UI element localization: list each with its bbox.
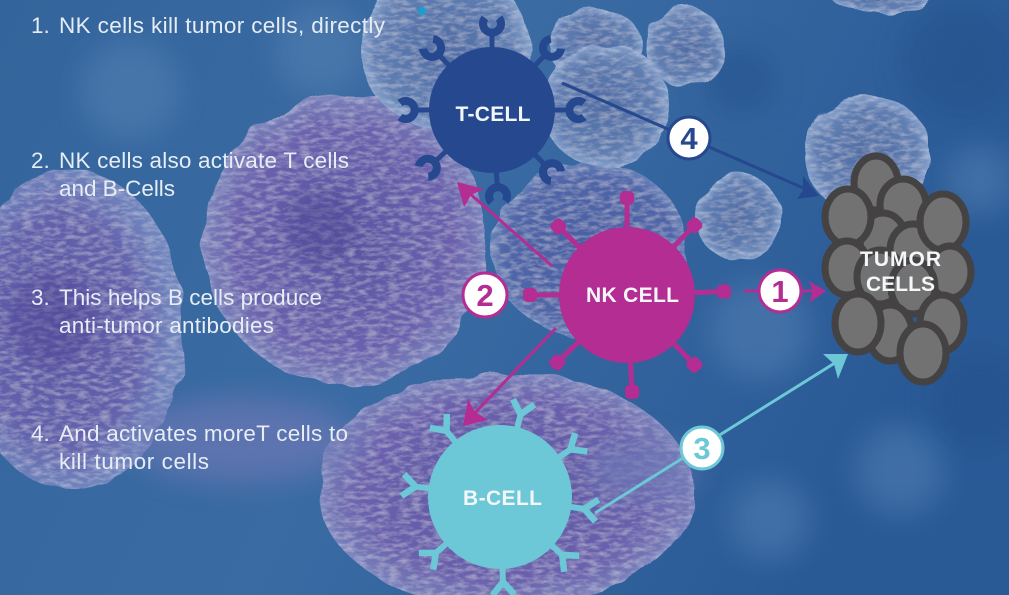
text: step 2: and B-Cells <box>59 176 175 201</box>
text: step 2: 2. <box>31 148 50 173</box>
badge 2 <box>463 273 507 317</box>
text: step 1: 1. <box>31 13 50 38</box>
T-cell <box>400 18 584 202</box>
tumor cell cluster <box>825 156 971 382</box>
text: step 3: 3. <box>31 285 50 310</box>
B-cell <box>401 399 599 595</box>
text: step 3 <box>31 285 322 338</box>
arrow 4: T-cell to tumor <box>562 83 819 199</box>
text: step 3: This helps B cells produce <box>59 285 322 310</box>
text: step 3: anti-tumor antibodies <box>59 313 274 338</box>
badge 2: 2 <box>476 278 494 313</box>
label: tumor cells: CELLS <box>866 273 935 296</box>
label: tumor cells: TUMOR <box>860 248 941 271</box>
text: step 2 <box>31 148 349 201</box>
badge 4: 4 <box>680 121 698 156</box>
text: step 4: And activates moreT cells to <box>59 421 348 446</box>
badge 1 <box>759 270 801 312</box>
label: tumor cells <box>860 248 941 296</box>
text: step 2: NK cells also activate T cells <box>59 148 349 173</box>
arrow 1: NK to tumor <box>744 281 826 303</box>
B-cell: B-CELL <box>463 487 542 510</box>
text: step 4: 4. <box>31 421 50 446</box>
badge 4 <box>668 117 710 159</box>
badge 3: 3 <box>693 431 711 466</box>
arrow 3: B-cell to tumor <box>595 354 848 513</box>
text: step 4 <box>31 421 348 474</box>
text: step 4: kill tumor cells <box>59 449 209 474</box>
NK cell <box>523 191 731 399</box>
arrow 2 up: NK to T-cell <box>457 182 552 266</box>
arrow 2 down: NK to B-cell <box>463 328 556 426</box>
T-cell: T-CELL <box>456 103 531 126</box>
NK cell: NK CELL <box>586 284 679 307</box>
dot <box>418 7 426 15</box>
badge 3 <box>681 427 723 469</box>
badge 1: 1 <box>771 274 789 309</box>
text: step 1: NK cells kill tumor cells, directly <box>59 13 386 38</box>
